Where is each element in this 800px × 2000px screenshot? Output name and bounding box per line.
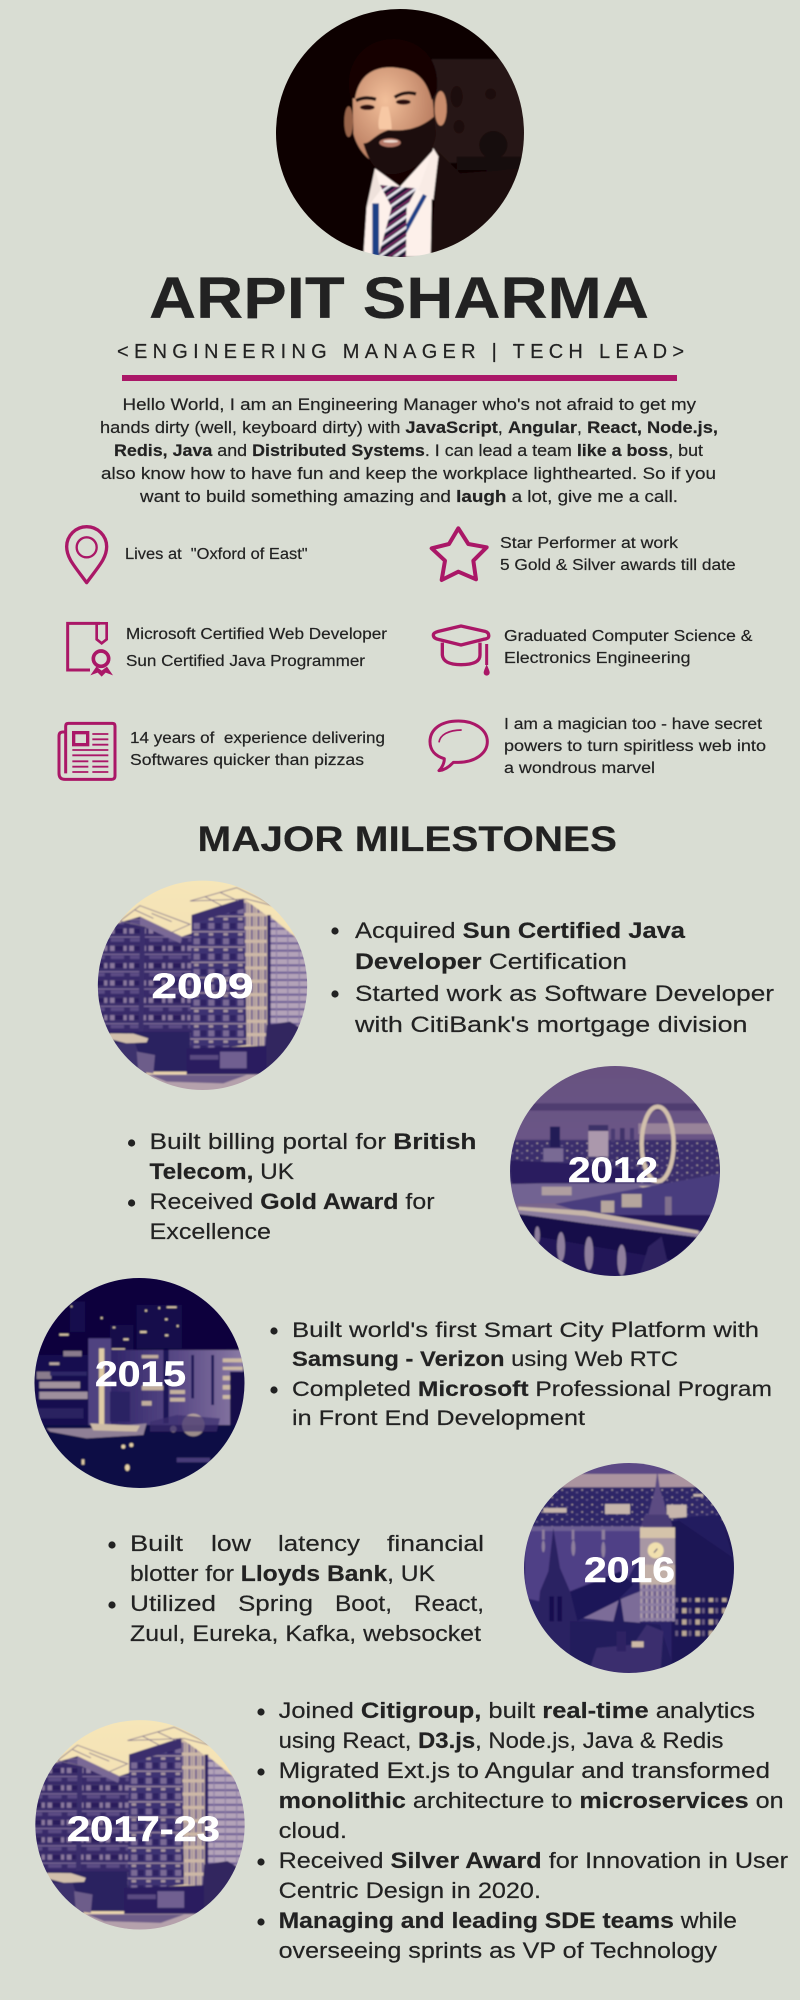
info: star performer: Star Performer at work <box>500 535 678 552</box>
milestone text: 2015: Samsung - Verizon using Web RTC <box>292 1347 678 1371</box>
milestone photo: 2012 <box>505 1060 725 1280</box>
milestone year: 2009: 2009 <box>152 967 254 1006</box>
milestone text: 2017-23 <box>257 1698 788 1963</box>
milestone text: 2009: Started work as Software Developer <box>355 981 775 1006</box>
icon: speech bubble <box>430 721 487 771</box>
icon: graduation cap <box>433 626 490 676</box>
milestone year: 2016: 2016 <box>584 1551 675 1590</box>
milestone text: 2015 <box>270 1318 772 1430</box>
title: ARPIT SHARMA <box>149 266 649 331</box>
info: location: Lives at "Oxford of East" <box>125 546 308 563</box>
portrait photo <box>270 3 530 263</box>
info: magician: I am a magician too - have secret <box>504 716 763 733</box>
milestone text: 2009 <box>331 918 775 1037</box>
milestone text: 2015: Built world's first Smart City Platform with <box>292 1318 759 1342</box>
milestone text: 2017-23: cloud. <box>279 1818 347 1843</box>
milestone text: 2017-23: Migrated Ext.js to Angular and transformed <box>279 1758 770 1783</box>
milestone text: 2016: React, <box>414 1591 484 1616</box>
intro paragraph: want to build something amazing and laugh a lot, give me a call. <box>139 487 678 506</box>
icon: star <box>432 528 487 580</box>
info: education <box>504 628 753 667</box>
milestone text: 2016 <box>108 1531 484 1646</box>
icon: location pin <box>67 527 107 583</box>
milestone text: 2012: Excellence <box>150 1219 271 1244</box>
milestone text: 2009: with CitiBank's mortgage division <box>354 1012 748 1037</box>
milestone text: 2016: Spring <box>238 1591 313 1616</box>
milestone text: 2015: in Front End Development <box>292 1406 585 1430</box>
icon: newspaper <box>59 723 115 779</box>
magenta divider <box>122 375 677 381</box>
info: education: Graduated Computer Science & <box>504 628 753 645</box>
icon: certificate <box>68 623 113 677</box>
milestone text: 2017-23: overseeing sprints as VP of Technology <box>279 1938 717 1963</box>
intro paragraph <box>100 395 718 506</box>
milestone text: 2016: blotter for Lloyds Bank , UK <box>130 1561 435 1586</box>
milestone year: 2015: 2015 <box>95 1355 186 1394</box>
milestone text: 2016: latency <box>278 1531 361 1556</box>
milestone photo: 2015 <box>30 1275 250 1495</box>
milestone text: 2016: financial <box>387 1531 484 1556</box>
intro paragraph: also know how to have fun and keep the workplace lighthearted. So if you <box>101 464 716 483</box>
milestone text: 2017-23: Received Silver Award for Innovation in User <box>279 1848 788 1873</box>
milestone photo: 2017-23 <box>28 1714 252 1934</box>
milestone text: 2017-23: using React, D3.js, Node.js, Java & Redis <box>279 1728 724 1753</box>
milestone text: 2017-23: Joined Citigroup, built real-time analytics <box>279 1698 755 1723</box>
milestone text: 2016: Boot, <box>335 1591 392 1616</box>
milestone text: 2017-23: Managing and leading SDE teams while <box>279 1908 737 1933</box>
intro paragraph: Redis, Java and Distributed Systems . I can lead a team like a boss , but <box>114 441 703 460</box>
info: certifications: Sun Certified Java Programmer <box>126 653 365 670</box>
subtitle: <ENGINEERING MANAGER | TECH LEAD> <box>117 341 684 363</box>
milestone year: 2017-23: 2017-23 <box>67 1810 220 1849</box>
info: experience: Softwares quicker than pizzas <box>130 752 364 769</box>
info: star performer: 5 Gold & Silver awards till date <box>500 557 736 574</box>
info: education: Electronics Engineering <box>504 650 690 667</box>
info: magician: powers to turn spiritless web into <box>504 738 766 755</box>
milestone text: 2012: Telecom, UK <box>150 1159 294 1184</box>
milestone text: 2012 <box>128 1129 476 1244</box>
milestone text: 2009: Developer Certification <box>355 949 627 974</box>
info: certifications: Microsoft Certified Web Developer <box>126 626 387 643</box>
milestone photo: 2009 <box>90 875 315 1095</box>
intro paragraph: hands dirty (well, keyboard dirty) with JavaScript , Angular , React, Node.js, <box>100 418 718 437</box>
milestone text: 2009: Acquired Sun Certified Java <box>355 918 686 943</box>
milestone text: 2016: Built <box>130 1531 184 1556</box>
milestone photo: 2016 <box>520 1458 740 1678</box>
milestone year: 2012: 2012 <box>568 1151 658 1190</box>
info: experience <box>130 730 385 769</box>
info: magician <box>504 716 766 777</box>
milestone text: 2016: low <box>211 1531 252 1556</box>
milestone text: 2016: Zuul, Eureka, Kafka, websocket <box>130 1621 482 1646</box>
milestone text: 2012: Built billing portal for British <box>150 1129 476 1154</box>
info: magician: a wondrous marvel <box>504 760 655 777</box>
info: star performer <box>500 535 736 574</box>
milestone text: 2015: Completed Microsoft Professional Program <box>292 1377 772 1401</box>
milestone text: 2017-23: Centric Design in 2020. <box>279 1878 541 1903</box>
heading: major milestones: MAJOR MILESTONES <box>198 820 617 859</box>
milestone text: 2012: Received Gold Award for <box>150 1189 435 1214</box>
intro paragraph: Hello World, I am an Engineering Manager who's not afraid to get my <box>122 395 697 414</box>
milestone text: 2017-23: monolithic architecture to microservices on <box>279 1788 784 1813</box>
info: experience: 14 years of experience delivering <box>130 730 385 747</box>
info: certifications <box>126 626 387 670</box>
milestone text: 2016: Utilized <box>130 1591 216 1616</box>
